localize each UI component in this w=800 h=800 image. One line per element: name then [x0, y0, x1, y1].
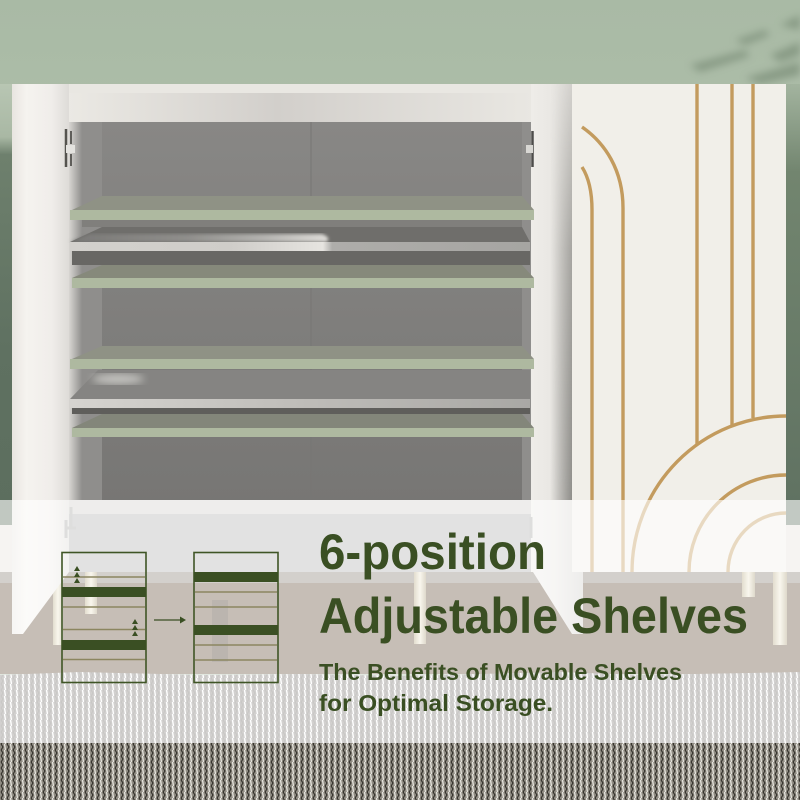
left door — [12, 84, 69, 634]
translucent shelf 4 — [72, 414, 534, 437]
hinge left — [66, 129, 75, 167]
rug — [0, 672, 800, 800]
cabinet legs — [53, 572, 787, 662]
translucent shelf 2 — [72, 265, 534, 288]
subtitle: The Benefits of Movable Shelves — [319, 659, 682, 685]
translucent shelf 3 — [70, 346, 534, 369]
left door inner glow — [68, 122, 82, 500]
back seam — [310, 122, 312, 500]
cabinet top panel — [68, 84, 532, 122]
arrow — [154, 616, 186, 624]
lower hinge right — [530, 517, 532, 538]
cabinet — [68, 84, 532, 572]
translucent shelf 1 — [70, 196, 534, 220]
hinge right — [526, 131, 533, 167]
title: Adjustable Shelves — [319, 588, 748, 644]
subtitle — [319, 659, 682, 716]
shelf diagram: before — [62, 552, 146, 682]
floor — [0, 572, 800, 674]
up arrows right — [132, 619, 138, 636]
cabinet interior back — [68, 122, 532, 572]
right door — [531, 84, 583, 634]
gold inlay lines — [582, 84, 786, 572]
shelf diagram: after — [194, 552, 278, 682]
wall background — [0, 0, 800, 580]
white translucent band — [0, 500, 800, 743]
subtitle: for Optimal Storage. — [319, 690, 553, 716]
interior bottom — [68, 500, 532, 572]
title: 6-position — [319, 524, 546, 580]
lower hinge left — [66, 507, 76, 538]
up arrows left — [74, 566, 80, 583]
white shelf 1 — [70, 220, 530, 265]
interior left side — [68, 122, 102, 500]
door fronts — [12, 84, 786, 634]
decorated front panel — [572, 84, 786, 572]
title — [319, 524, 748, 644]
shelves — [70, 196, 534, 437]
white shelf 2 — [70, 370, 530, 414]
baseboard — [0, 525, 800, 572]
interior right side — [522, 122, 532, 500]
